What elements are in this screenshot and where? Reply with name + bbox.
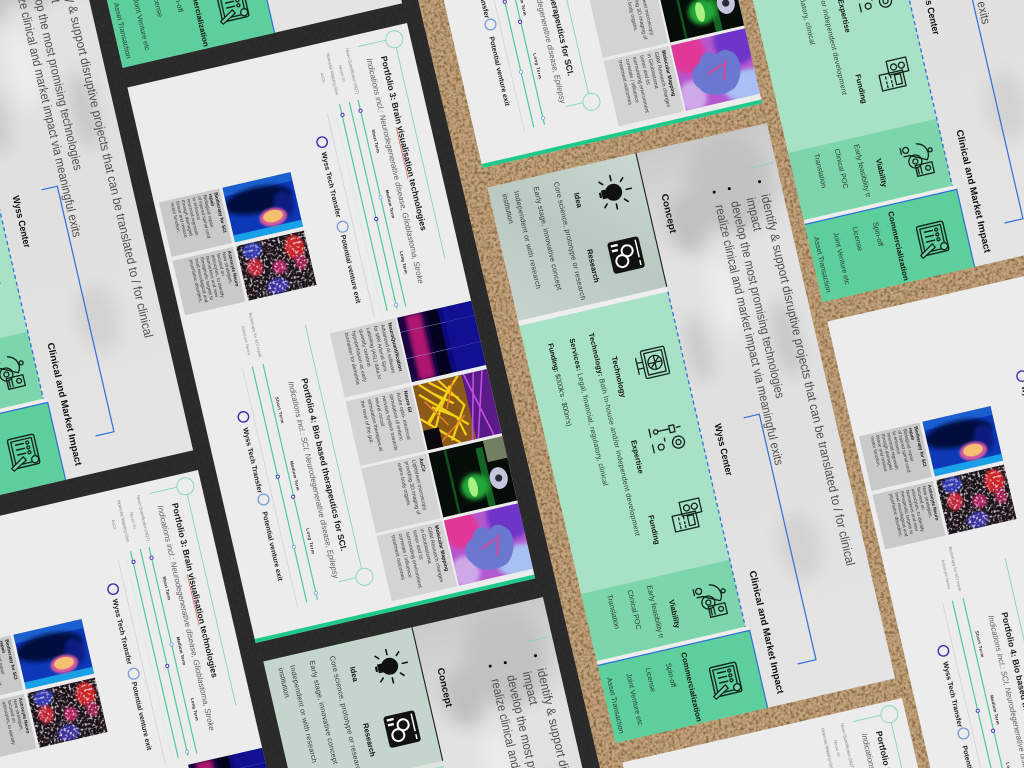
text box: astrocyte: Astrocyte Neuro	[227, 250, 240, 287]
list: commercialization: Asset Transaction	[112, 2, 133, 59]
project list	[315, 48, 360, 102]
text box: molecular mapping: treatment outcomes	[390, 535, 406, 581]
bullets: impact	[744, 196, 765, 233]
slide: portfolio, top middle-right	[354, 0, 780, 168]
icon: viability	[693, 582, 730, 620]
heading: wyss center: Wyss Center	[712, 423, 734, 477]
text box: astrocyte: therapeutic targets to	[899, 491, 914, 535]
icon: viability	[0, 354, 28, 392]
text box: aucir: providing 3D imaging of	[403, 461, 421, 516]
timeline: Medium Term	[176, 636, 187, 666]
text box: aucir: entire body organs.	[396, 462, 412, 507]
project list: Neuro GI	[338, 65, 347, 82]
text box: molecular mapping	[604, 46, 684, 126]
list: viability: Early feasibility tr	[645, 584, 666, 640]
portfolio 4	[916, 535, 1024, 768]
text box: molecular mapping: surrounding environment	[631, 56, 650, 114]
timeline: Medium Term	[989, 695, 1001, 725]
labels: column titles: Viability	[667, 599, 682, 630]
icon: viability	[900, 141, 937, 179]
bullets: realize clinical and market impact via meaningful exits	[712, 203, 786, 467]
timeline: Medium Term	[385, 189, 396, 219]
labels: column titles	[348, 666, 377, 758]
text box: biotherapy: neuronal regrowth	[186, 198, 199, 236]
legend	[237, 410, 288, 582]
icon: commercialization	[5, 434, 41, 472]
text box: molecular mapping: correlate / influence	[624, 58, 640, 104]
text box: neuroquantification: quantify cerebral	[357, 329, 372, 367]
text box: astrocyte: astrocytes, to identify	[210, 254, 225, 299]
text box: astrocyte: Astrocyte Neuro	[18, 697, 31, 734]
bracket	[39, 186, 114, 436]
labels: column titles: Research	[361, 722, 377, 758]
list: commercialization	[605, 662, 686, 734]
panel: wyss center	[0, 64, 43, 433]
text box: molecular mapping: GBM Research changes	[426, 526, 444, 583]
text box: neuroquantification: for MRI Arterial Spin	[372, 325, 388, 372]
text box: neuro gi: stimulation of enteric	[387, 394, 404, 442]
panel: wyss center	[726, 0, 937, 153]
project list	[820, 723, 855, 768]
icon: research	[383, 710, 421, 748]
list: wyss center: Funding: $000k's - $00m's)	[546, 342, 574, 427]
list: concept: institution	[500, 193, 516, 224]
legend: Potential venture exit	[487, 36, 510, 107]
timeline: Short Term	[162, 576, 172, 600]
text box: biotherapy: neuronal regrowth	[886, 432, 899, 470]
list: viability	[605, 584, 666, 649]
labels: column titles: Viability	[874, 158, 889, 189]
text box: aucir	[361, 454, 441, 533]
project list: Neuro GI	[129, 512, 138, 529]
text box: astrocyte: New strategies,	[921, 486, 933, 518]
legend: Wyss Tech Transfer	[111, 598, 132, 666]
list: concept: institution	[276, 667, 292, 698]
card background	[354, 0, 762, 168]
panel: concept cell	[263, 627, 443, 768]
labels: column titles: Idea	[348, 666, 360, 683]
list: viability: Translation	[605, 593, 622, 630]
text box: neuroquantification: Advanced AI software	[379, 324, 396, 374]
labels: column titles: Research	[585, 248, 601, 284]
text box: molecular mapping: Molecular Mapping	[660, 50, 676, 97]
slide: portfolio, lower left	[0, 470, 326, 768]
text box: biotherapy: motor function.	[870, 436, 881, 467]
portfolio 3	[0, 476, 254, 768]
icon: lightbulb	[596, 172, 635, 212]
icon: funding	[669, 498, 705, 532]
image: molecular mapping	[437, 486, 552, 592]
text box: neuroquantification: NeuroQuantification	[386, 322, 403, 372]
project list: AuCir	[110, 519, 118, 531]
text box: astrocyte	[0, 694, 37, 762]
labels: column titles: Commercialization	[679, 651, 704, 723]
text box: biotherapy: of injured spinal cord	[897, 430, 912, 473]
text box: astrocyte	[172, 247, 246, 315]
list: commercialization: Asset Transaction	[812, 236, 833, 293]
text box: astrocyte: treat neurological and	[894, 492, 909, 537]
text box: neuroquantification	[330, 318, 410, 398]
panel: wyss center	[295, 766, 506, 768]
labels: column titles: Technology	[610, 355, 628, 399]
list: wyss center: Services: Legal, financial, regulatory, clinical	[568, 337, 610, 487]
text box: biotherapy: repair	[208, 193, 216, 207]
text box: biotherapy: Biotherapy for SCI	[4, 639, 18, 680]
heading: clinical and market impact: Clinical and Market Impact	[747, 570, 786, 696]
icon: research	[607, 236, 645, 274]
line: concept divider	[412, 627, 443, 761]
green bottom bar	[255, 574, 535, 643]
marker circle	[356, 29, 453, 267]
text box: neuro gi: Neuro GI	[402, 390, 413, 414]
slide: concept, top middle column	[0, 0, 402, 68]
text box: biotherapy: through damaged	[881, 433, 894, 471]
text box: molecular mapping: in Glioblastoma	[645, 53, 659, 89]
labels: column titles: Expertise	[629, 439, 646, 475]
image: biotherapy	[920, 406, 1003, 477]
list: concept: Early stage, innovative concept	[308, 660, 340, 765]
image: biotherapy	[11, 619, 94, 690]
labels: column titles	[572, 191, 704, 723]
project list: Molecular Mapping Gbm	[116, 500, 131, 543]
list: wyss center	[774, 0, 849, 100]
text box: biotherapy	[0, 635, 23, 704]
timeline: Short Term	[974, 630, 985, 658]
legend	[316, 136, 366, 305]
slide: portfolio, bottom right	[622, 698, 1024, 768]
accent line	[750, 163, 773, 168]
list: commercialization: Spin-off	[871, 221, 885, 247]
text box: biotherapy: tissue and restore	[175, 201, 188, 238]
image: biotherapy	[220, 172, 303, 243]
icon: lightbulb	[372, 646, 411, 686]
timeline: Long Term	[305, 528, 316, 554]
dashed line	[0, 64, 43, 399]
accent line	[526, 637, 549, 642]
timeline: Long Term	[532, 53, 543, 79]
project list: Molecular Mapping Gbm	[325, 53, 340, 96]
marker circle	[147, 476, 244, 714]
text box: astrocyte: psychiatric disorders.	[889, 493, 903, 537]
text box: astrocyte	[872, 481, 946, 549]
bullets	[485, 652, 634, 768]
panel: viability	[581, 560, 745, 661]
image: neuroquantification	[188, 748, 277, 768]
card background	[127, 23, 535, 643]
slide: concept, far left column	[0, 0, 193, 515]
list: commercialization	[812, 221, 893, 293]
heading: concept: Concept	[434, 667, 454, 709]
text box: molecular mapping: tumor and its	[411, 530, 424, 561]
text box: biotherapy: of injured spinal cord	[197, 196, 212, 239]
legend: Potential venture exit	[130, 681, 152, 752]
bullets: identify & support disruptive projects that can be translated to / for clinical	[758, 193, 858, 567]
text box: molecular mapping: correlate / influence	[397, 533, 413, 579]
subtitle: Indications incl.: Neurodegenerative disease, Glioblastoma, Stroke	[156, 504, 216, 732]
list: commercialization: Joint Venture etc	[831, 231, 852, 286]
text box: astrocyte: astrocytes, to identify	[910, 488, 925, 533]
title: Portfolio 3: Brain visualisation technologies	[379, 55, 429, 232]
subtitle: Indications incl.: Neurodegenerative disease, Glioblastoma, Stroke	[365, 57, 425, 285]
dashed line	[668, 292, 745, 627]
text box: molecular mapping: Molecular Mapping	[433, 525, 449, 572]
list: viability: Clinical POC	[833, 148, 851, 190]
list: concept: Early stage, innovative concept	[532, 186, 564, 291]
icon: commercialization	[707, 662, 743, 700]
timeline	[243, 362, 327, 608]
list: wyss center	[546, 332, 642, 546]
icon: technology	[634, 346, 670, 380]
timeline: Medium Term	[289, 461, 301, 491]
text box: biotherapy	[859, 422, 932, 491]
list: viability: Clinical POC	[626, 589, 644, 631]
text box: aucir	[588, 0, 668, 58]
marker circle	[281, 322, 375, 591]
image: neuroquantification	[397, 301, 486, 382]
project list: Astrocyte Neuro	[240, 325, 252, 356]
image: astrocyte	[236, 230, 317, 301]
project list: Biotherapy for SCI repair	[248, 312, 263, 359]
bracket	[948, 0, 1023, 223]
marker circle	[851, 704, 948, 768]
list: wyss center: Technology: Both In-house and/or independent development	[587, 332, 642, 537]
timeline: Short Term	[371, 129, 381, 153]
list: concept: Core science, prototype or research	[552, 181, 588, 301]
panel: wyss center	[519, 292, 730, 594]
list: commercialization: Asset Transaction	[605, 677, 626, 734]
text box: biotherapy: through damaged	[181, 199, 194, 237]
text box: biotherapy: to enhance	[191, 197, 202, 221]
labels: column titles: Funding	[646, 514, 662, 546]
text box: astrocyte: New strategies,	[221, 252, 233, 284]
bullets: develop the most promising technologies	[728, 200, 787, 400]
bullets	[709, 178, 858, 578]
heading: concept: Concept	[658, 193, 678, 235]
timeline	[117, 545, 208, 765]
marker circle	[508, 0, 602, 116]
panel: commercialization	[104, 0, 275, 68]
slide: concept, top right	[694, 0, 1024, 302]
text box: neuroquantification: hypoperfusion as early	[350, 330, 368, 383]
image: molecular mapping	[664, 11, 779, 117]
image: aucir	[655, 0, 744, 43]
legend	[468, 0, 515, 107]
text box: neuro gi: nervous system towards	[380, 395, 399, 452]
slide: concept, center	[487, 123, 895, 743]
list: concept	[276, 655, 364, 768]
timeline	[470, 0, 554, 133]
title: Portfolio 4: Bio based therapeutics for SCI.	[299, 377, 349, 552]
panel: commercialization	[804, 185, 975, 302]
labels: column titles: Funding	[853, 73, 869, 105]
list: concept: Independent or with research	[288, 664, 319, 764]
subtitle: Indications incl.: SCI, Neurodegenerative disease, Epilepsy	[286, 380, 341, 580]
timeline	[943, 596, 1024, 768]
list: commercialization: License	[644, 667, 658, 693]
list: concept: Independent or with research	[512, 190, 543, 290]
timeline: Long Term	[399, 251, 409, 274]
project list: Neuro Quantification (NQT)	[136, 495, 151, 542]
text box: biotherapy: motor function.	[170, 202, 181, 233]
text box: biotherapy: Biological repair	[202, 194, 215, 228]
project list	[106, 495, 151, 549]
text box: biotherapy: Biotherapy for SCI	[213, 192, 227, 233]
text box: biotherapy	[159, 188, 232, 257]
legend: portfolio 3	[1016, 370, 1024, 453]
line: concept divider	[636, 153, 667, 287]
text box: astrocyte: New strategies,	[12, 699, 24, 731]
text box: astrocyte: biomarkers and new	[905, 489, 919, 532]
text box: biotherapy: repair	[908, 427, 916, 441]
text box: aucir: AuCir	[417, 458, 426, 473]
list: concept	[500, 181, 588, 313]
icon: commercialization	[914, 221, 950, 259]
bullets	[7, 0, 156, 350]
legend: Wyss Tech Transfer	[241, 427, 263, 494]
text box: neuro gi: neural circuit	[373, 397, 386, 427]
bullets: impact	[520, 670, 541, 707]
text box: neuro gi: stimulation therapies at	[366, 399, 384, 452]
text box: neuroquantification: biomarker for dementia	[343, 332, 361, 385]
bracket	[741, 414, 816, 664]
heading: clinical and market impact: Clinical and Market Impact	[954, 129, 993, 255]
text box: neuroquantification: Labelling (ASL) data to	[364, 327, 382, 380]
divider: white gap	[518, 287, 668, 326]
text box: molecular mapping: surrounding environment	[404, 531, 423, 589]
project list: Astrocyte Neuro	[940, 559, 952, 590]
legend: Wyss Tech Transfer	[320, 151, 341, 219]
text box: biotherapy: Biological repair	[902, 428, 915, 462]
text box: astrocyte: psychiatric disorders.	[189, 259, 203, 303]
background: cork board	[418, 0, 1024, 768]
text box: astrocyte: treat neurological and	[194, 258, 209, 303]
labels: column titles: Commercialization	[886, 210, 911, 282]
title: Portfolio 3: Brain visualisation technologies	[170, 502, 220, 679]
text box: astrocyte: focused on	[216, 253, 226, 277]
green bottom bar	[482, 99, 762, 168]
text box: neuro gi: the level of the gut.	[359, 400, 374, 444]
text box: astrocyte: focused on	[916, 487, 926, 511]
icon: funding	[0, 270, 3, 304]
text box: astrocyte: astrocytes, to identify	[1, 701, 16, 746]
text box: aucir: Lightsheet microscopy	[410, 459, 428, 511]
timeline: Short Term	[274, 396, 285, 424]
slide: concept, bottom middle	[263, 597, 671, 768]
card background	[0, 470, 326, 768]
text box: molecular mapping: treatment outcomes	[617, 60, 633, 106]
text box: molecular mapping	[377, 521, 457, 601]
text box: biotherapy: Biotherapy for SCI	[913, 426, 927, 467]
legend: Potential venture exit	[339, 234, 361, 305]
panel: viability	[788, 119, 952, 220]
image: astrocyte	[936, 464, 1017, 535]
legend: Wyss Tech Transfer	[941, 661, 963, 728]
text box: astrocyte: therapeutic targets to	[199, 257, 214, 301]
panel: commercialization	[597, 626, 768, 743]
text box: molecular mapping: tumor and its	[638, 55, 651, 86]
text box: neuro gi: Acute opto- electrical	[395, 392, 411, 440]
legend	[107, 583, 157, 752]
portfolio 4	[216, 260, 552, 630]
panel: concept cell	[487, 153, 667, 321]
icon: commercialization	[214, 0, 250, 25]
project list: Biotherapy for SCI repair	[948, 546, 963, 593]
slide: portfolio, center	[127, 19, 553, 643]
project list	[238, 312, 263, 361]
text box: biotherapy: to enhance	[891, 431, 902, 455]
project list: Neuro GI	[833, 740, 842, 757]
timeline: Long Term	[190, 698, 200, 721]
portfolio 3	[133, 29, 463, 359]
list: commercialization: Joint Venture etc	[624, 672, 645, 727]
slide: portfolio, right	[827, 257, 1024, 768]
heading: wyss center: Wyss Center	[10, 195, 32, 249]
labels: column titles	[836, 0, 911, 282]
labels: column titles: Idea	[572, 192, 584, 209]
text box: biotherapy: tissue and restore	[875, 435, 888, 472]
icon: funding	[876, 57, 912, 91]
text box: neuro gi	[346, 386, 426, 466]
list: commercialization: Spin-off	[664, 662, 678, 688]
list: viability: Early feasibility tr	[852, 143, 873, 199]
card background	[827, 257, 1024, 768]
text box: molecular mapping: GBM Research changes	[653, 51, 671, 108]
project list: Neuro Quantification (NQT)	[345, 48, 360, 95]
dashed line	[875, 0, 952, 186]
list: viability	[812, 143, 873, 208]
heading: clinical and market impact: Clinical and Market Impact	[45, 342, 84, 468]
card background	[622, 698, 1024, 768]
image: astrocyte	[27, 677, 108, 748]
legend	[937, 644, 988, 768]
image: aucir	[428, 436, 517, 518]
icon: expertise	[649, 422, 686, 454]
list: commercialization: License	[851, 226, 865, 252]
list: commercialization	[112, 0, 193, 59]
text box: astrocyte: focused on	[7, 700, 17, 724]
panel: commercialization	[0, 398, 66, 515]
project list: AuCir	[319, 72, 327, 84]
legend: Potential venture exit	[260, 511, 283, 582]
timeline	[326, 98, 417, 318]
list: viability: Translation	[812, 152, 829, 189]
icon: expertise	[856, 0, 893, 13]
project list	[938, 546, 963, 595]
text box: astrocyte: Astrocyte Neuro	[927, 484, 940, 521]
text box: astrocyte: biomarkers and new	[205, 255, 219, 298]
text box: molecular mapping: in Glioblastoma	[418, 528, 432, 564]
image: neuro gi	[413, 369, 502, 450]
